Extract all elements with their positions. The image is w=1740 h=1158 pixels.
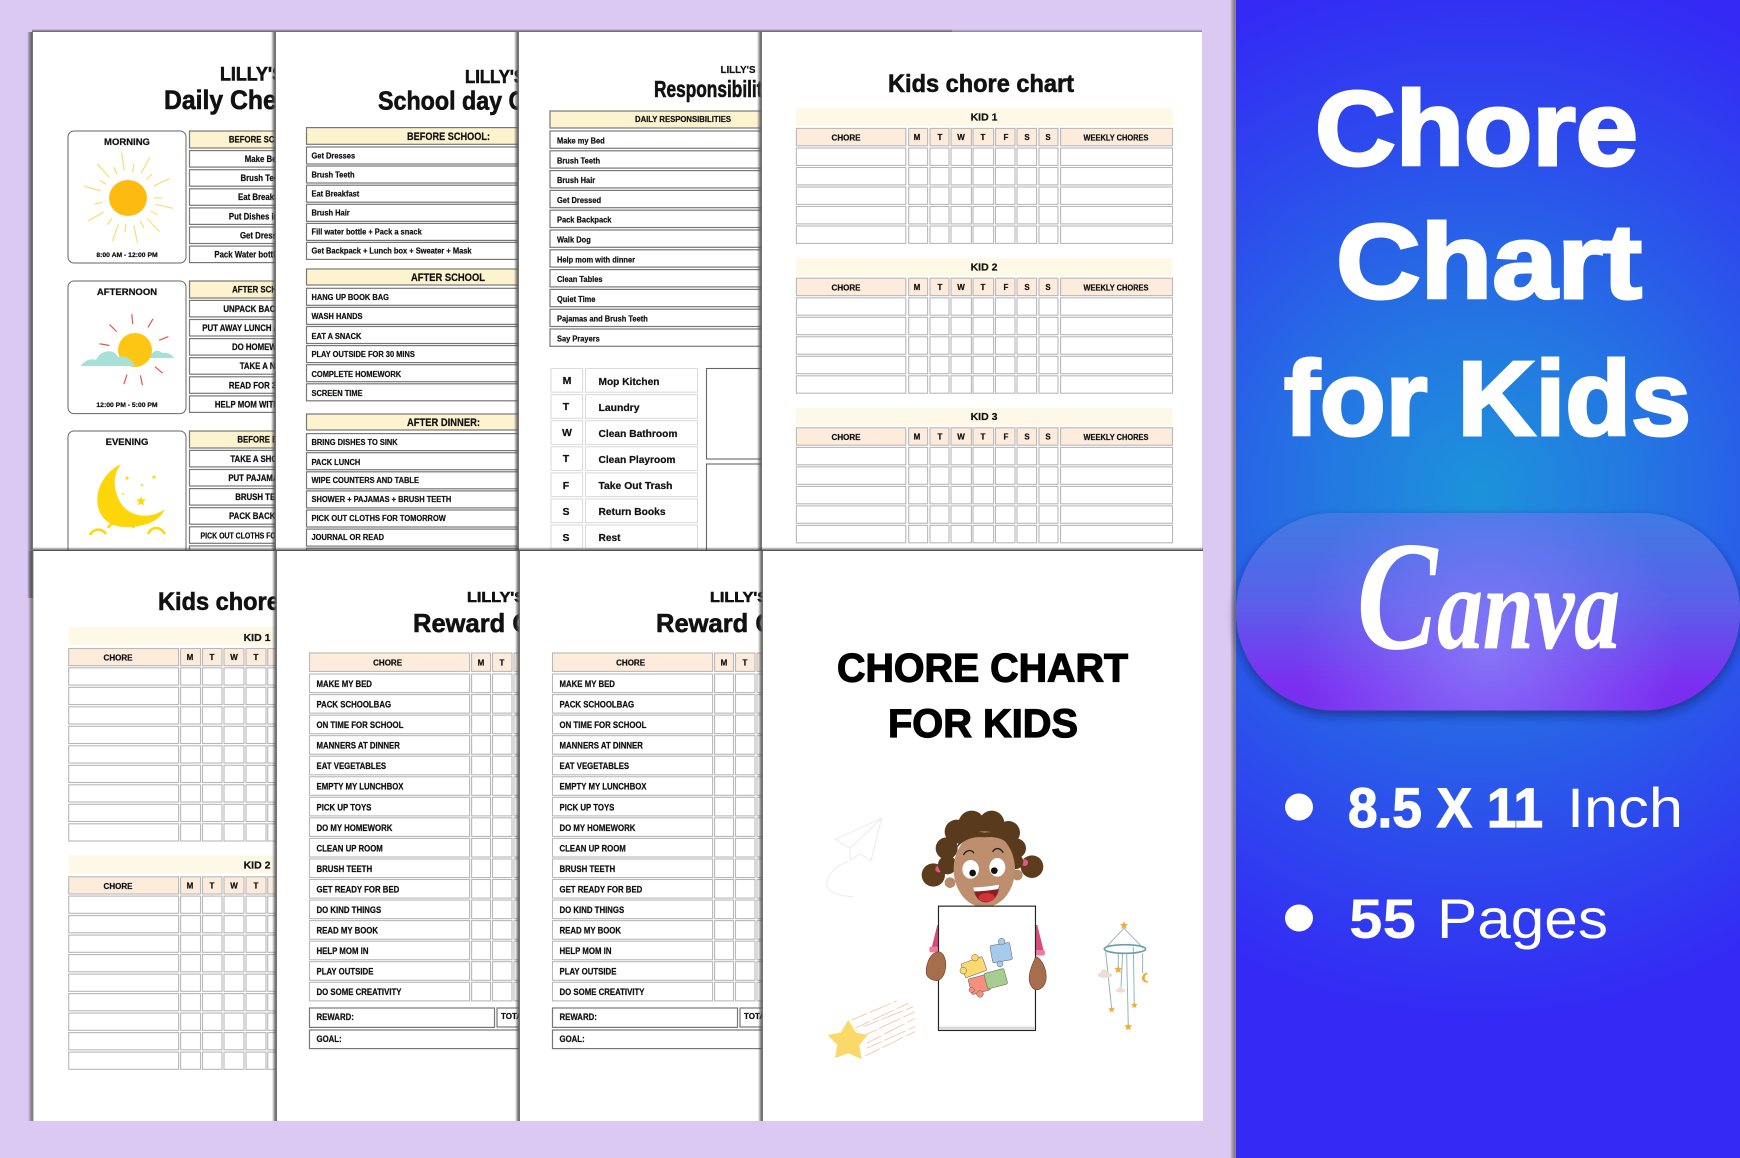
table: reward chart: M xyxy=(721,658,728,668)
table: reward chart: GOAL: xyxy=(316,1033,342,1044)
table: reward chart: CLEAN UP ROOM xyxy=(316,843,383,854)
table: kid 2: M xyxy=(914,283,921,292)
table: kid 1: KID 1 xyxy=(971,112,998,124)
checklist text: daily: Make Bed xyxy=(245,153,281,164)
table: kid 1: T xyxy=(981,133,986,142)
page shadow: top edge of upper row xyxy=(32,29,1202,32)
bullet: page count xyxy=(1285,887,1608,950)
page: kids chore chart, three kids xyxy=(761,32,1202,550)
cover title xyxy=(837,646,1128,746)
table: reward chart xyxy=(552,653,942,1049)
table: reward chart: READ MY BOOK xyxy=(316,925,378,936)
table: kid 1: CHORE xyxy=(832,134,861,142)
table: kid 2: W xyxy=(957,283,965,292)
illustration: shooting star xyxy=(828,1001,915,1059)
checklist text: school day: JOURNAL OR READ xyxy=(312,533,384,542)
checklist text: school day: PLAY OUTSIDE FOR 30 MINS xyxy=(312,350,415,359)
girl: face xyxy=(962,849,1005,902)
icon: sun with clouds xyxy=(81,314,174,385)
table: kid 1: W xyxy=(230,653,238,662)
heading: daily checklist: LILLY'S xyxy=(220,64,284,86)
table: reward chart: M xyxy=(478,658,485,668)
table: kid 2: T xyxy=(210,882,215,890)
checklist text: school day: EAT A SNACK xyxy=(312,332,362,341)
girl: hair and head xyxy=(922,811,1043,907)
table: kid 3: S xyxy=(1024,432,1030,442)
table: kid 2 xyxy=(796,258,1172,393)
checklist text: daily: HELP MOM WITH DINNER xyxy=(215,399,311,410)
table: reward chart: DO MY HOMEWORK xyxy=(560,822,635,833)
table: reward chart: MANNERS AT DINNER xyxy=(560,740,643,751)
checklist text: school day: PACK LUNCH xyxy=(312,458,360,467)
checklist text: daily: BRUSH TEETH xyxy=(235,491,291,502)
weekly chores table: Clean Bathroom xyxy=(598,428,678,440)
weekly chores table: M xyxy=(563,375,572,387)
checklist text: school day: COMPLETE HOMEWORK xyxy=(312,370,401,379)
heading: responsibility chart: LILLY'S xyxy=(720,64,756,76)
checklist text: daily: PICK OUT CLOTHS FOR TOMORROW xyxy=(201,531,326,541)
section headings: school day: AFTER SCHOOL xyxy=(411,272,485,284)
table: kid 1: F xyxy=(1004,133,1009,142)
checklist rows: daily xyxy=(188,130,275,550)
bullet: page size xyxy=(1285,776,1683,839)
illustration: girl holding puzzle sign xyxy=(922,811,1046,1030)
checklist text: daily: Pack Water bottle + Snack xyxy=(214,249,312,260)
girl: hands xyxy=(926,952,1046,990)
heading: reward chart: LILLY'S xyxy=(467,589,525,606)
heading: daily checklist xyxy=(165,66,275,115)
page shadow: top edge of lower row xyxy=(33,547,1203,551)
checklist text: responsibilities: Brush Hair xyxy=(557,176,596,185)
checklist text: responsibilities: Quiet Time xyxy=(557,294,596,304)
checklist text: daily: TAKE A SHOWER xyxy=(230,453,296,464)
table: reward chart: PICK UP TOYS xyxy=(560,802,615,812)
page: responsibility chart xyxy=(519,32,761,550)
table: kid 1: T xyxy=(938,133,943,142)
page: kids chore chart, two kids xyxy=(33,551,276,1121)
main title xyxy=(1284,70,1691,458)
table: kid 2: T xyxy=(938,283,943,292)
table: reward chart: TOTAL xyxy=(744,1012,770,1021)
panel: afternoon card: AFTERNOON xyxy=(97,287,157,298)
table: kid 2: CHORE xyxy=(104,882,133,891)
table: reward chart: MAKE MY BED xyxy=(316,678,372,689)
table: reward chart: TOTAL xyxy=(501,1012,527,1021)
weekly chores table: W xyxy=(562,427,572,439)
table: reward chart: MANNERS AT DINNER xyxy=(316,740,400,751)
table: reward chart: BRUSH TEETH xyxy=(560,863,615,874)
table: kid 2: F xyxy=(1004,283,1009,292)
heading: reward chart xyxy=(414,592,519,632)
table: reward chart: DO SOME CREATIVITY xyxy=(560,987,645,997)
illustration: paper plane xyxy=(827,818,882,897)
checklist text: school day: WASH HANDS xyxy=(312,312,363,321)
table: reward chart: T xyxy=(743,658,748,668)
page: daily checklist xyxy=(33,32,275,550)
table: reward chart: DO MY HOMEWORK xyxy=(316,822,392,833)
panel: evening card xyxy=(68,431,186,563)
checklist text: daily: Put Dishes in Sink xyxy=(229,211,297,222)
heading: reward chart xyxy=(657,592,762,632)
icon: sun xyxy=(84,152,173,243)
checklist text: daily: AFTER SCHOOL xyxy=(232,284,294,295)
panel: afternoon card: 12:00 PM - 5:00 PM xyxy=(96,402,158,409)
table: reward chart: ON TIME FOR SCHOOL xyxy=(560,719,646,730)
weekly chores table: T xyxy=(563,453,570,465)
table: kid 1: W xyxy=(957,133,965,142)
table: reward chart: MAKE MY BED xyxy=(560,678,615,689)
checklist text: responsibilities: Help mom with dinner xyxy=(557,255,636,264)
table: kid 1: M xyxy=(914,133,921,142)
checklist text: daily: DO HOMEWORK xyxy=(232,341,294,352)
table: reward chart: PACK SCHOOLBAG xyxy=(560,699,634,710)
table: kid 1: T xyxy=(210,653,215,662)
table: kid 3: W xyxy=(957,432,965,442)
table: kid 1: T xyxy=(254,653,259,662)
checklist text: responsibilities: Walk Dog xyxy=(557,235,591,245)
table: reward chart: HELP MOM IN xyxy=(316,946,368,956)
checklist text: school day xyxy=(312,151,472,542)
table: reward chart: DO KIND THINGS xyxy=(316,904,382,915)
section headings: school day xyxy=(407,131,490,429)
checklist text: responsibilities: Clean Tables xyxy=(557,275,603,284)
weekly chores table: Clean Playroom xyxy=(598,454,676,466)
table: kid 3 xyxy=(796,408,1172,543)
table: reward chart: ON TIME FOR SCHOOL xyxy=(316,719,403,730)
table: reward chart: PLAY OUTSIDE xyxy=(560,966,617,977)
heading: kids chore chart: Kids chore chart xyxy=(158,588,345,616)
bullet: page count: Pages xyxy=(1437,887,1608,950)
main title: for Kids xyxy=(1284,340,1691,458)
weekly chores table: S xyxy=(562,506,570,518)
page shadow: left edge of responsibility chart xyxy=(514,32,519,550)
table: kid 2: T xyxy=(254,882,259,890)
table: kid 2: KID 2 xyxy=(971,262,998,274)
table: kid 1: M xyxy=(187,653,194,662)
table: reward chart: REWARD: xyxy=(316,1011,354,1022)
heading: reward chart: LILLY'S xyxy=(710,589,768,606)
table: reward chart: CLEAN UP ROOM xyxy=(560,843,626,854)
weekly chores table: Return Books xyxy=(598,506,666,518)
section headings: school day: AFTER DINNER: xyxy=(407,417,480,429)
checklist text: school day: Brush Hair xyxy=(312,208,350,218)
table: kid 2: WEEKLY CHORES xyxy=(1084,284,1149,292)
checklist text: responsibilities: Brush Teeth xyxy=(557,156,600,165)
table: kid 3: T xyxy=(938,432,943,442)
badge: canva xyxy=(1236,510,1740,710)
checklist text: daily: UNPACK BACKPACK xyxy=(223,303,303,314)
table: reward chart: HELP MOM IN xyxy=(560,946,611,956)
table: reward chart: DO SOME CREATIVITY xyxy=(316,987,402,997)
table: reward chart: READ MY BOOK xyxy=(560,925,621,936)
table: reward chart: EMPTY MY LUNCHBOX xyxy=(316,781,404,792)
panel: morning card xyxy=(68,131,186,263)
table: kid 1: KID 1 xyxy=(244,632,271,644)
table: reward chart: EAT VEGETABLES xyxy=(560,761,629,771)
table: reward chart: CHORE xyxy=(373,658,403,668)
puzzle pieces xyxy=(960,938,1013,997)
page: reward chart two xyxy=(520,551,762,1121)
notes boxes xyxy=(706,368,761,550)
heading: kids chore chart: Kids chore chart xyxy=(888,70,1075,98)
table: kid 2: CHORE xyxy=(832,284,861,292)
panel: morning card: MORNING xyxy=(104,137,150,148)
table: reward chart: CHORE xyxy=(616,658,646,668)
girl: sign xyxy=(938,906,1035,1030)
checklist text: school day: SCREEN TIME xyxy=(312,389,363,398)
table: reward chart: PICK UP TOYS xyxy=(316,802,372,812)
weekly chores table: T xyxy=(563,401,570,413)
heading: school day checklist xyxy=(378,70,518,116)
page shadow: left edge of reward chart one xyxy=(272,551,277,1121)
weekly chores table: Mop Kitchen xyxy=(598,376,660,388)
table: reward chart: REWARD: xyxy=(560,1011,597,1022)
checklist text: responsibilities: Say Prayers xyxy=(557,334,600,344)
illustration: baby mobile xyxy=(1098,921,1148,1030)
table: reward chart xyxy=(308,652,519,1050)
checklist text: responsibilities: Get Dressed xyxy=(557,195,601,205)
page shadow: left edge of kids chore chart xyxy=(757,32,762,550)
panel: product info xyxy=(1236,0,1740,1158)
table: kid 2: S xyxy=(1024,283,1030,292)
table: reward chart: BRUSH TEETH xyxy=(316,863,372,874)
checklist text: school day: BRING DISHES TO SINK xyxy=(312,438,398,447)
heading: responsibility chart xyxy=(654,66,761,102)
badge: canva: Canva xyxy=(1357,510,1620,682)
checklist text: school day: Brush Teeth xyxy=(312,170,355,180)
table: kid 3: T xyxy=(981,432,986,442)
checklist text: daily: TAKE A NAP xyxy=(240,360,287,371)
checklist text: daily: Eat Breakfast xyxy=(238,191,288,202)
checklist text: school day: HANG UP BOOK BAG xyxy=(312,293,389,302)
heading: school day checklist: LILLY'S xyxy=(465,67,525,87)
checklist text: school day: Get Dresses xyxy=(312,151,356,161)
page shadow: left edge of school day checklist xyxy=(271,32,276,550)
checklist text: responsibilities: DAILY RESPONSIBILITIES xyxy=(635,115,732,124)
table: kid 1: S xyxy=(1045,133,1051,142)
table: kid 2: M xyxy=(187,882,194,890)
checklist text: responsibilities: Make my Bed xyxy=(557,136,605,146)
table: reward chart: GET READY FOR BED xyxy=(560,884,642,895)
panel: evening card: EVENING xyxy=(106,437,148,448)
table: reward chart: EAT VEGETABLES xyxy=(316,761,386,771)
checklist text: responsibilities: Pajamas and Brush Teeth xyxy=(557,314,648,324)
weekly chores table: S xyxy=(562,532,570,544)
table: kid 1: S xyxy=(1024,133,1030,142)
heading: reward chart: Reward Chart xyxy=(413,608,579,638)
page: school day checklist xyxy=(276,32,518,550)
table: kid 1: CHORE xyxy=(104,654,133,662)
page shadow: left edge of cover xyxy=(758,551,763,1121)
girl: sleeves xyxy=(929,925,1045,956)
table: kid 2: S xyxy=(1045,283,1051,292)
table: reward chart: GET READY FOR BED xyxy=(316,884,399,895)
weekly chores table: Laundry xyxy=(598,402,640,414)
weekly chores table: Take Out Trash xyxy=(598,480,672,492)
checklist text: daily: Get Dressed xyxy=(240,230,286,241)
table: reward chart: T xyxy=(500,658,505,668)
heading: responsibility chart: Responsibility Chart xyxy=(654,76,822,102)
heading: school day checklist: School day Checklist xyxy=(378,86,612,116)
weekly chores table xyxy=(551,368,698,549)
checklist text: school day: Fill water bottle + Pack a snack xyxy=(312,227,422,237)
main title: Chart xyxy=(1336,203,1642,321)
checklist text: school day: WIPE COUNTERS AND TABLE xyxy=(312,476,420,485)
main title: Chore xyxy=(1315,70,1638,188)
checklist text: daily: BEFORE BED xyxy=(237,434,289,445)
checklist text: daily: PACK BACKPACK xyxy=(229,510,297,521)
panel: morning card: 8:00 AM - 12:00 PM xyxy=(96,252,158,259)
page shadow: left edge of lower row xyxy=(28,551,34,1121)
bullet: page size: Inch xyxy=(1567,776,1683,839)
table: reward chart: GOAL: xyxy=(560,1033,585,1044)
checklist rows: responsibilities xyxy=(549,110,761,347)
checklist text: school day: Get Backpack + Lunch box + Sweater + Mask xyxy=(312,246,472,256)
bullet: page size: 8.5 X 11 xyxy=(1348,776,1543,839)
weekly chores table: Rest xyxy=(598,532,621,544)
section headings: school day: BEFORE SCHOOL: xyxy=(407,131,490,143)
table: reward chart: PLAY OUTSIDE xyxy=(316,966,374,977)
checklist text: school day: SHOWER + PAJAMAS + BRUSH TEETH xyxy=(312,495,451,504)
checklist text: daily xyxy=(200,136,275,539)
table: kid 3: M xyxy=(914,432,921,442)
weekly chores table: F xyxy=(563,480,570,492)
page shadow: left edge of reward chart two xyxy=(515,551,520,1121)
checklist text: daily: BEFORE SCHOOL xyxy=(229,134,297,145)
table: kid 2: T xyxy=(981,283,986,292)
table: kid 1: WEEKLY CHORES xyxy=(1084,134,1149,142)
icon: crescent moon xyxy=(90,464,165,535)
table: kid 1 xyxy=(796,108,1172,243)
cover title: CHORE CHART xyxy=(837,646,1128,690)
checklist text: daily: Brush Teeth xyxy=(240,172,286,183)
heading: daily checklist: Daily Checklist xyxy=(164,85,340,115)
table: kid 3: S xyxy=(1045,432,1051,442)
table: kid 3: WEEKLY CHORES xyxy=(1084,433,1149,442)
table: kid 2 xyxy=(68,855,276,1070)
checklist rows: school day xyxy=(306,127,518,550)
table: reward chart: PACK SCHOOLBAG xyxy=(316,699,391,710)
checklist text: responsibilities xyxy=(557,115,732,344)
table: reward chart: EMPTY MY LUNCHBOX xyxy=(560,781,647,792)
table: kid 3: CHORE xyxy=(832,433,861,442)
table: kid 2: KID 2 xyxy=(244,860,271,872)
page: cover xyxy=(762,551,1203,1121)
checklist text: daily: PUT AWAY LUNCH AND BOTTLE xyxy=(202,322,324,333)
panel: afternoon card xyxy=(68,281,186,414)
side panel shadow xyxy=(1230,0,1236,1158)
heading: reward chart: Reward Chart xyxy=(656,608,822,638)
page shadow: left edge of daily checklist xyxy=(27,32,33,598)
table: reward chart: DO KIND THINGS xyxy=(560,904,625,915)
checklist text: school day: Eat Breakfast xyxy=(312,189,360,199)
table: kid 3: F xyxy=(1004,432,1009,442)
checklist text: school day: PICK OUT CLOTHS FOR TOMORROW xyxy=(312,514,446,523)
table: kid 3: KID 3 xyxy=(971,411,998,423)
checklist text: daily: PUT PAJAMAS ON xyxy=(228,472,298,483)
checklist text: responsibilities: Pack Backpack xyxy=(557,215,612,225)
bullet: page count: 55 xyxy=(1349,887,1416,950)
cover title: FOR KIDS xyxy=(888,702,1078,746)
page: reward chart one xyxy=(277,551,519,1121)
checklist text: daily: READ FOR 30 MIN xyxy=(229,380,297,391)
table: kid 1 xyxy=(68,627,276,842)
table: kid 2: W xyxy=(230,882,238,890)
